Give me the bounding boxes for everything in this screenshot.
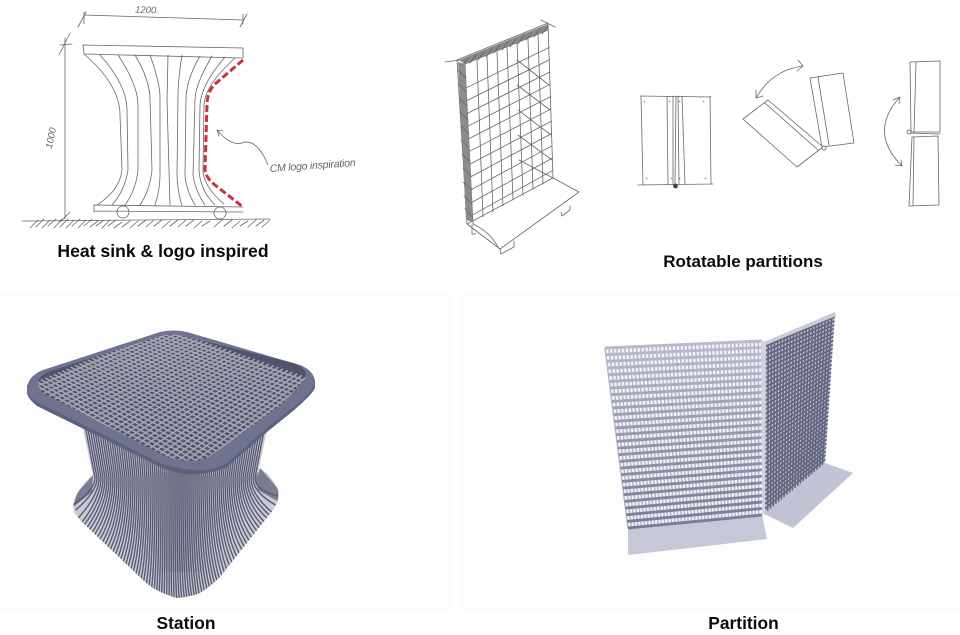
right grid panel [764,312,836,513]
wall base [467,178,579,254]
pivot [673,184,678,188]
panel: heat sink sketch [22,5,356,228]
rotation arrow [756,60,803,98]
note: CM logo inspiration: CM logo inspiration [269,157,356,175]
wall outline [445,20,555,224]
panel: partition render [605,312,853,555]
station top rim [27,330,315,470]
right base plate [762,463,853,528]
red dashed logo line [205,60,243,207]
dimension: height 1000 [44,33,72,222]
panel: partitions side by side sketch [638,96,713,188]
panel: station render [25,325,320,605]
panel: partitions rotated sketch [743,60,854,167]
wall top hatching [459,24,548,66]
arrow to logo line [217,130,268,165]
station top rim underside [27,380,315,474]
left base plate [628,515,767,555]
wheels [117,206,226,219]
panel: partitions aligned sketch [884,61,940,206]
caption: heat sink: Heat sink & logo inspired [57,241,269,261]
centre post [761,341,766,515]
wall grid [467,34,553,217]
caption: partition: Partition [708,613,779,633]
dimension: height 1000: 1000 [44,126,59,150]
heat sink fins [84,54,235,205]
pivot [822,146,826,150]
station body with fins [74,428,278,598]
caption: rotatable partitions: Rotatable partitions [663,252,823,271]
ground hatching [22,219,270,228]
rotation arrow [884,97,902,166]
station top grid [38,334,306,461]
left grid panel [605,341,762,528]
pivot [907,130,911,134]
dimension: width 1200: 1200. [135,5,159,16]
caption: station: Station [157,613,215,633]
wall side hatching [458,62,473,222]
bottom slab [94,205,243,212]
station top slab [83,45,243,58]
panel: wall partition sketch [445,20,579,254]
dimension: width 1200 [78,5,247,27]
